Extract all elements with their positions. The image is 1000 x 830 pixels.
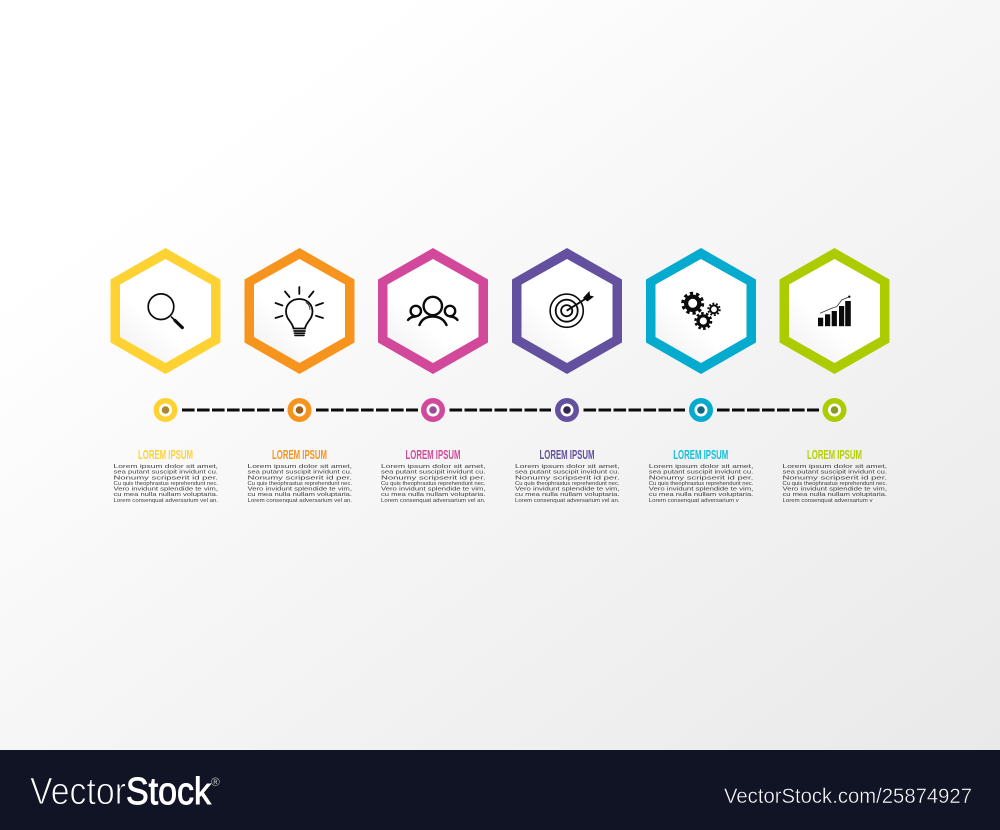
text block 6: Nonumy scripserit id per.: [782, 475, 888, 481]
footer logo: [30, 771, 220, 813]
text block 5: sea putant suscipit invidunt cu.: [649, 470, 754, 476]
text block 5: Lorem ipsum dolor sit amet,: [649, 464, 754, 470]
text block 5: Vero invidunt splendide te vim,: [649, 487, 754, 493]
text block 6: [782, 447, 888, 504]
text block 2: sea putant suscipit invidunt cu.: [248, 470, 353, 476]
text block 1: cu mea nulla nullam voluptaria.: [114, 492, 219, 498]
text block 3: LOREM IPSUM: [406, 447, 460, 462]
timeline marker 6: [822, 398, 846, 422]
text block 2: [248, 447, 353, 504]
text block 3: Vero invidunt splendide te vim,: [381, 487, 486, 493]
timeline marker 4: [555, 398, 579, 422]
text block 3: Nonumy scripserit id per.: [381, 475, 486, 481]
text block 5: cu mea nulla nullam voluptaria.: [649, 492, 754, 498]
timeline marker 2: [288, 398, 312, 422]
text block 6: Vero invidunt splendide te vim,: [782, 487, 888, 493]
hexagon 6: growth chart: [780, 248, 890, 374]
text block 2: Cu quis theophrastus reprehendunt nec.: [248, 481, 352, 487]
text block 5: [649, 447, 754, 504]
timeline marker 1: [154, 398, 178, 422]
text block 4: cu mea nulla nullam voluptaria.: [515, 492, 620, 498]
hexagon 3: team: [378, 248, 488, 374]
icon: gears: [683, 293, 720, 329]
footer logo: Vector: [30, 771, 126, 813]
text block 5: Lorem consenquat adversarium v: [649, 498, 739, 504]
text block 2: Vero invidunt splendide te vim,: [248, 487, 353, 493]
text block 1: Lorem consenquat adversarium vel an.: [114, 498, 218, 504]
text block 6: LOREM IPSUM: [807, 447, 862, 462]
text block 6: Lorem ipsum dolor sit amet,: [782, 464, 888, 470]
text block 4: Nonumy scripserit id per.: [515, 475, 620, 481]
text block 3: sea putant suscipit invidunt cu.: [381, 470, 486, 476]
hexagon 1: search: [110, 248, 220, 374]
text block 6: cu mea nulla nullam voluptaria.: [782, 492, 888, 498]
text block 2: Lorem ipsum dolor sit amet,: [248, 464, 353, 470]
text block 5: Cu quis theophrastus reprehendunt nec.: [649, 481, 754, 487]
text block 4: LOREM IPSUM: [540, 447, 594, 462]
text block 3: cu mea nulla nullam voluptaria.: [381, 492, 486, 498]
text block 1: Lorem ipsum dolor sit amet,: [114, 464, 219, 470]
text block 1: LOREM IPSUM: [138, 447, 193, 462]
text block 2: cu mea nulla nullam voluptaria.: [248, 492, 353, 498]
hexagon 2: idea: [244, 248, 354, 374]
text block 3: [381, 447, 486, 504]
footer image id: VectorStock.com/25874927: [724, 785, 972, 808]
text block 6: Lorem consenquat adversarium v: [782, 498, 873, 504]
text block 3: Cu quis theophrastus reprehendunt nec.: [381, 481, 486, 487]
text block 1: Cu quis theophrastus reprehendunt nec.: [114, 481, 218, 487]
icon: light bulb: [276, 287, 323, 335]
text block 4: Lorem consenquat adversarium vel an.: [515, 498, 620, 504]
text block 2: Lorem consenquat adversarium vel an.: [248, 498, 352, 504]
icon: bar chart with trend line: [818, 296, 851, 326]
icon: target with arrow: [550, 291, 594, 327]
text block 4: [515, 447, 620, 504]
text block 1: Nonumy scripserit id per.: [114, 475, 219, 481]
hexagon 5: gears: [646, 248, 756, 374]
text block 4: Vero invidunt splendide te vim,: [515, 487, 620, 493]
text block 1: sea putant suscipit invidunt cu.: [114, 470, 219, 476]
text block 6: sea putant suscipit invidunt cu.: [782, 470, 888, 476]
timeline marker 5: [689, 398, 713, 422]
text block 3: Lorem consenquat adversarium vel an.: [381, 498, 486, 504]
text block 3: Lorem ipsum dolor sit amet,: [381, 464, 486, 470]
text block 5: LOREM IPSUM: [673, 447, 728, 462]
timeline marker 3: [421, 398, 445, 422]
text block 2: LOREM IPSUM: [272, 447, 327, 462]
hexagon 4: target: [512, 248, 622, 374]
text block 5: Nonumy scripserit id per.: [649, 475, 754, 481]
text block 2: Nonumy scripserit id per.: [248, 475, 353, 481]
text block 1: Vero invidunt splendide te vim,: [114, 487, 219, 493]
text block 4: Cu quis theophrastus reprehendunt nec.: [515, 481, 620, 487]
text block 6: Cu quis theophrastus reprehendunt nec.: [782, 481, 887, 487]
footer bar: [0, 750, 1000, 830]
footer logo: ®: [211, 775, 220, 789]
dashed timeline: [182, 408, 819, 412]
text block 1: [114, 447, 219, 504]
text block 4: sea putant suscipit invidunt cu.: [515, 470, 620, 476]
footer logo: Stock: [126, 771, 212, 813]
icon: three people: [408, 297, 458, 325]
text block 4: Lorem ipsum dolor sit amet,: [515, 464, 620, 470]
icon: magnifying glass: [148, 294, 182, 328]
